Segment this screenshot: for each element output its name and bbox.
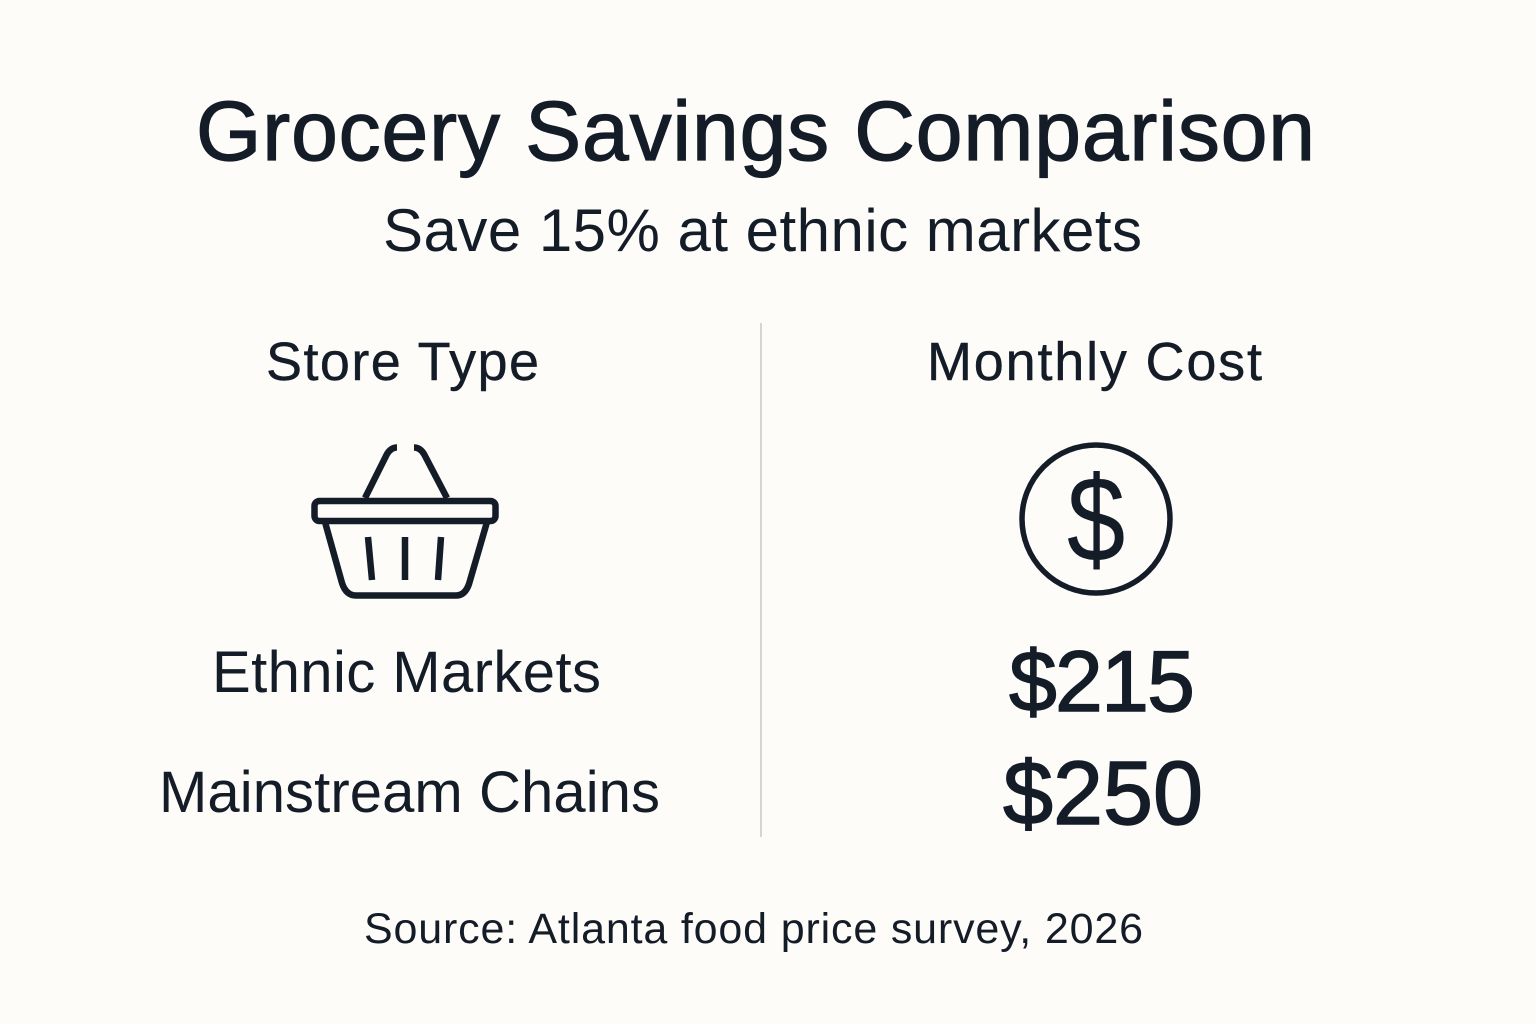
icon: shopping basket (314, 448, 496, 596)
source note: Source: Atlanta food price survey, 2026 (364, 905, 1143, 953)
title: Grocery Savings Comparison (196, 84, 1315, 178)
value: mainstream chains cost: $250 (1003, 744, 1203, 844)
column: monthly cost (927, 332, 1262, 844)
label: mainstream chains: Mainstream Chains (159, 760, 660, 825)
icon: dollar coin (1022, 445, 1170, 593)
value: ethnic markets cost: $215 (1009, 634, 1195, 730)
label: ethnic markets: Ethnic Markets (212, 640, 601, 705)
heading: monthly cost: Monthly Cost (927, 332, 1262, 392)
heading: store type: Store Type (266, 332, 539, 392)
icon: dollar coin: $ (1067, 452, 1125, 588)
subtitle: Save 15% at ethnic markets (383, 197, 1142, 264)
column: store type (159, 332, 660, 825)
